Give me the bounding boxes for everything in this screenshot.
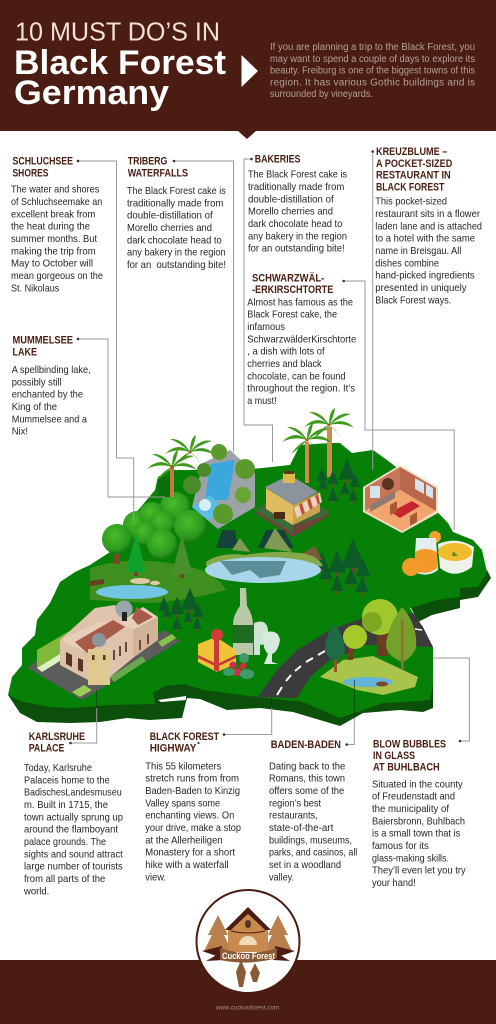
body text (375, 197, 482, 306)
restaurant room (363, 465, 438, 533)
heading: BLACK FOREST (150, 731, 219, 743)
body text: large number of tourists (24, 862, 123, 873)
body text: offers some of the (269, 786, 345, 797)
heading: KARLSRUHE (29, 731, 85, 743)
panel: Black Forest Highway (145, 731, 241, 883)
heading: WATERFALLS (128, 168, 188, 180)
body text (127, 186, 226, 271)
heading: KREUZBLUME – (376, 146, 447, 158)
body text (11, 185, 103, 294)
header banner (0, 0, 496, 139)
body text: famous for its (372, 841, 429, 852)
body text: Black Forest cake, the (247, 310, 337, 321)
body text: summer months. But (11, 234, 97, 245)
heading (128, 156, 188, 180)
body text: , a dish with lots of (247, 347, 325, 358)
body text: of Schluchseemake an (11, 197, 103, 208)
intro text: region. It has various Gothic buildings and is (270, 78, 475, 89)
intro text: may want to spend a couple of days to explore its (270, 54, 475, 65)
intro text (270, 42, 475, 100)
body text: a must! (247, 396, 277, 407)
body text: mean gorgeous on the (11, 271, 103, 282)
body text: Morello cherries and (248, 207, 333, 218)
body text: any bakery in the region (127, 248, 226, 259)
body text: Almost has famous as the (247, 297, 353, 308)
body text: glass-making skills. (372, 853, 449, 864)
body text: the municipality of (372, 804, 449, 815)
body text: The water and shores (11, 185, 99, 196)
heading (252, 271, 333, 296)
body text: Baden-Baden to Kinzig (145, 786, 240, 797)
body text (248, 170, 347, 255)
heading (376, 146, 453, 193)
body text: dishes combine (375, 258, 439, 269)
body text: cherries and black (247, 359, 322, 370)
body text (12, 365, 91, 438)
body text: double-distillation of (248, 194, 334, 205)
body text: at the Allerheiligen (145, 835, 223, 846)
panel: Kreuzblume (375, 146, 482, 306)
waterfall (183, 444, 255, 529)
icon: fir trees (204, 915, 292, 951)
body text: enchanting views. On (145, 811, 235, 822)
panel: Karlsruhe Palace (23, 731, 123, 897)
body text: dark chocolate head to (127, 235, 222, 246)
body text: presented in uniquely (375, 283, 467, 294)
body text: Situated in the county (372, 779, 463, 790)
body text: Monastery for a short (145, 848, 235, 859)
body text: valley. (269, 872, 294, 883)
palm trees by the waterfall (147, 435, 215, 497)
website url: www.cuckooforest.com (215, 1005, 279, 1012)
body text: restaurant sits in a flower (375, 209, 481, 220)
body text: sights and sound attract (24, 849, 123, 860)
heading (150, 731, 219, 755)
palm trees by the bakery (282, 408, 354, 483)
title: Black Forest (14, 44, 226, 82)
body text: your drive, make a stop (145, 823, 241, 834)
panel: Triberg Waterfalls (127, 156, 226, 271)
meadow and pond (90, 561, 226, 603)
body text: is a small town that is (372, 829, 460, 840)
body text: state-of-the-art (269, 823, 333, 834)
bakery (255, 471, 330, 537)
body text: Romans, this town (269, 774, 345, 785)
body text: The Black Forest cake is (248, 170, 347, 181)
body text: This 55 kilometers (145, 761, 221, 772)
heading: AT BUHLBACH (373, 762, 440, 774)
body text: laden lane and is attached (375, 221, 482, 232)
body text: the heat during the (11, 222, 90, 233)
body text: Valley spans some (145, 798, 220, 809)
body text: chocolate, can be found (247, 371, 346, 382)
connector lines (69, 150, 469, 746)
heading: SCHWARZWÄL- (252, 271, 325, 284)
body text: infamous (247, 322, 285, 333)
body text: restaurants, (269, 811, 318, 822)
icon: cuckoo clock house (225, 907, 271, 952)
body text: hike with a waterfall (145, 860, 229, 871)
heading: -ERKIRSCHTORTE (252, 284, 333, 296)
body text: around the flamboyant (24, 825, 118, 836)
pine clusters (158, 458, 370, 631)
lake (205, 528, 323, 583)
body text: set in a woodland (269, 860, 341, 871)
body text: Morello cherries and (127, 223, 212, 234)
heading: BAKERIES (255, 154, 300, 166)
heading: SHORES (12, 168, 48, 180)
body text: This pocket-sized (375, 197, 447, 208)
body text: name in Breisgau. All (375, 246, 461, 257)
panel: Schluchsee Shores (11, 156, 103, 294)
Baden-Baden meadow and trees (320, 599, 418, 695)
body text: May to October will (11, 259, 93, 270)
title: 10 MUST DO’S IN (15, 17, 220, 47)
body text: hand-picked ingredients (375, 271, 475, 282)
body text (145, 761, 241, 883)
body text: world. (23, 886, 49, 897)
body text: enchanted by the (12, 390, 83, 401)
arrow (242, 55, 258, 87)
body text: stretch runs from from (145, 774, 239, 785)
body text: view. (145, 872, 166, 883)
body text: parks, and casinos, all (269, 848, 357, 859)
body text: A spellbinding lake, (12, 365, 91, 376)
intro text: beauty. Freiburg is one of the biggest towns of this (270, 66, 475, 77)
heading: LAKE (12, 346, 37, 358)
body text (269, 761, 357, 883)
panel: Blow Bubbles in Glass (372, 738, 466, 889)
body text: dark chocolate head to (248, 219, 343, 230)
body text: traditionally made from (248, 182, 344, 193)
body text: palace grounds. The (24, 837, 106, 848)
body text: traditionally made from (127, 198, 223, 209)
body text: for an outstanding bite! (248, 244, 345, 255)
heading: MUMMELSEE (12, 334, 73, 346)
body text: Mummelsee and a (12, 414, 87, 425)
body text: to a hotel with the same (375, 234, 475, 245)
body text: SchwarzwälderKirschtorte (247, 334, 357, 345)
title: Germany (14, 74, 169, 112)
body text: buildings, museums, (269, 835, 352, 846)
road (258, 613, 433, 698)
body text: of Freudenstadt and (372, 792, 455, 803)
heading: PALACE (29, 743, 64, 755)
body text: Baiersbronn, Buhlbach (372, 816, 465, 827)
body text: excellent break from (11, 209, 95, 220)
juice and soup (402, 531, 474, 576)
icon: pine cone weights (236, 960, 260, 987)
body text: m. Built in 1715, the (24, 800, 108, 811)
heading (12, 334, 73, 358)
body text: St. Nikolaus (11, 283, 59, 294)
intro text: surrounded by vineyards. (270, 89, 373, 100)
heading: BLOW BUBBLES (373, 738, 446, 750)
heading: BADEN-BADEN (271, 739, 341, 751)
body text: King of the (12, 402, 57, 413)
heading (373, 738, 446, 774)
body text (23, 763, 123, 897)
body text: Black Forest ways. (375, 295, 451, 306)
body text: from all parts of the (24, 874, 106, 885)
panel: Mummelsee Lake (12, 334, 91, 438)
body text (247, 297, 357, 407)
heading: TRIBERG (128, 156, 167, 168)
body text: possibly still (12, 377, 62, 388)
body text: Today, Karlsruhe (24, 763, 92, 774)
body text: Palaceis home to the (24, 775, 110, 786)
logo: Cuckoo Forest (196, 890, 300, 993)
map of the Black Forest (8, 150, 491, 746)
body text: They’ll even let you try (372, 866, 466, 877)
heading (29, 731, 85, 755)
body text: making the trip from (11, 246, 96, 257)
heading: HIGHWAY (150, 743, 196, 755)
body text: town actually sprung up (24, 812, 123, 823)
intro text: If you are planning a trip to the Black Forest, you (270, 42, 475, 53)
body text: region’s best (269, 798, 321, 809)
panel: Baden-Baden (269, 739, 357, 883)
palace (28, 600, 180, 700)
body text: The Black Forest cake is (127, 186, 226, 197)
body text (372, 779, 466, 889)
forest trees (102, 492, 206, 578)
panel: Schwarzwälderkirschtorte (247, 271, 357, 407)
banner with brand name: Cuckoo Forest (222, 951, 275, 961)
body text: BadischesLandesmuseu (24, 788, 122, 799)
panel: Bakeries (248, 154, 347, 255)
heading: BLACK FOREST (376, 181, 445, 193)
body text: for an outstanding bite! (127, 260, 226, 271)
body text: any bakery in the region (248, 231, 347, 242)
wine and gift (198, 588, 280, 679)
body text: Dating back to the (269, 761, 346, 772)
heading: IN GLASS (373, 750, 415, 762)
body text: throughout the region. It’s (247, 384, 355, 395)
title (14, 17, 226, 112)
body text: your hand! (372, 878, 416, 889)
body text: double-distillation of (127, 211, 213, 222)
heading (12, 156, 73, 180)
heading: A POCKET-SIZED (376, 158, 453, 170)
body text: Nix! (12, 427, 28, 438)
footer band (0, 960, 496, 1024)
heading: SCHLUCHSEE (12, 156, 73, 168)
heading: RESTAURANT IN (376, 169, 451, 181)
